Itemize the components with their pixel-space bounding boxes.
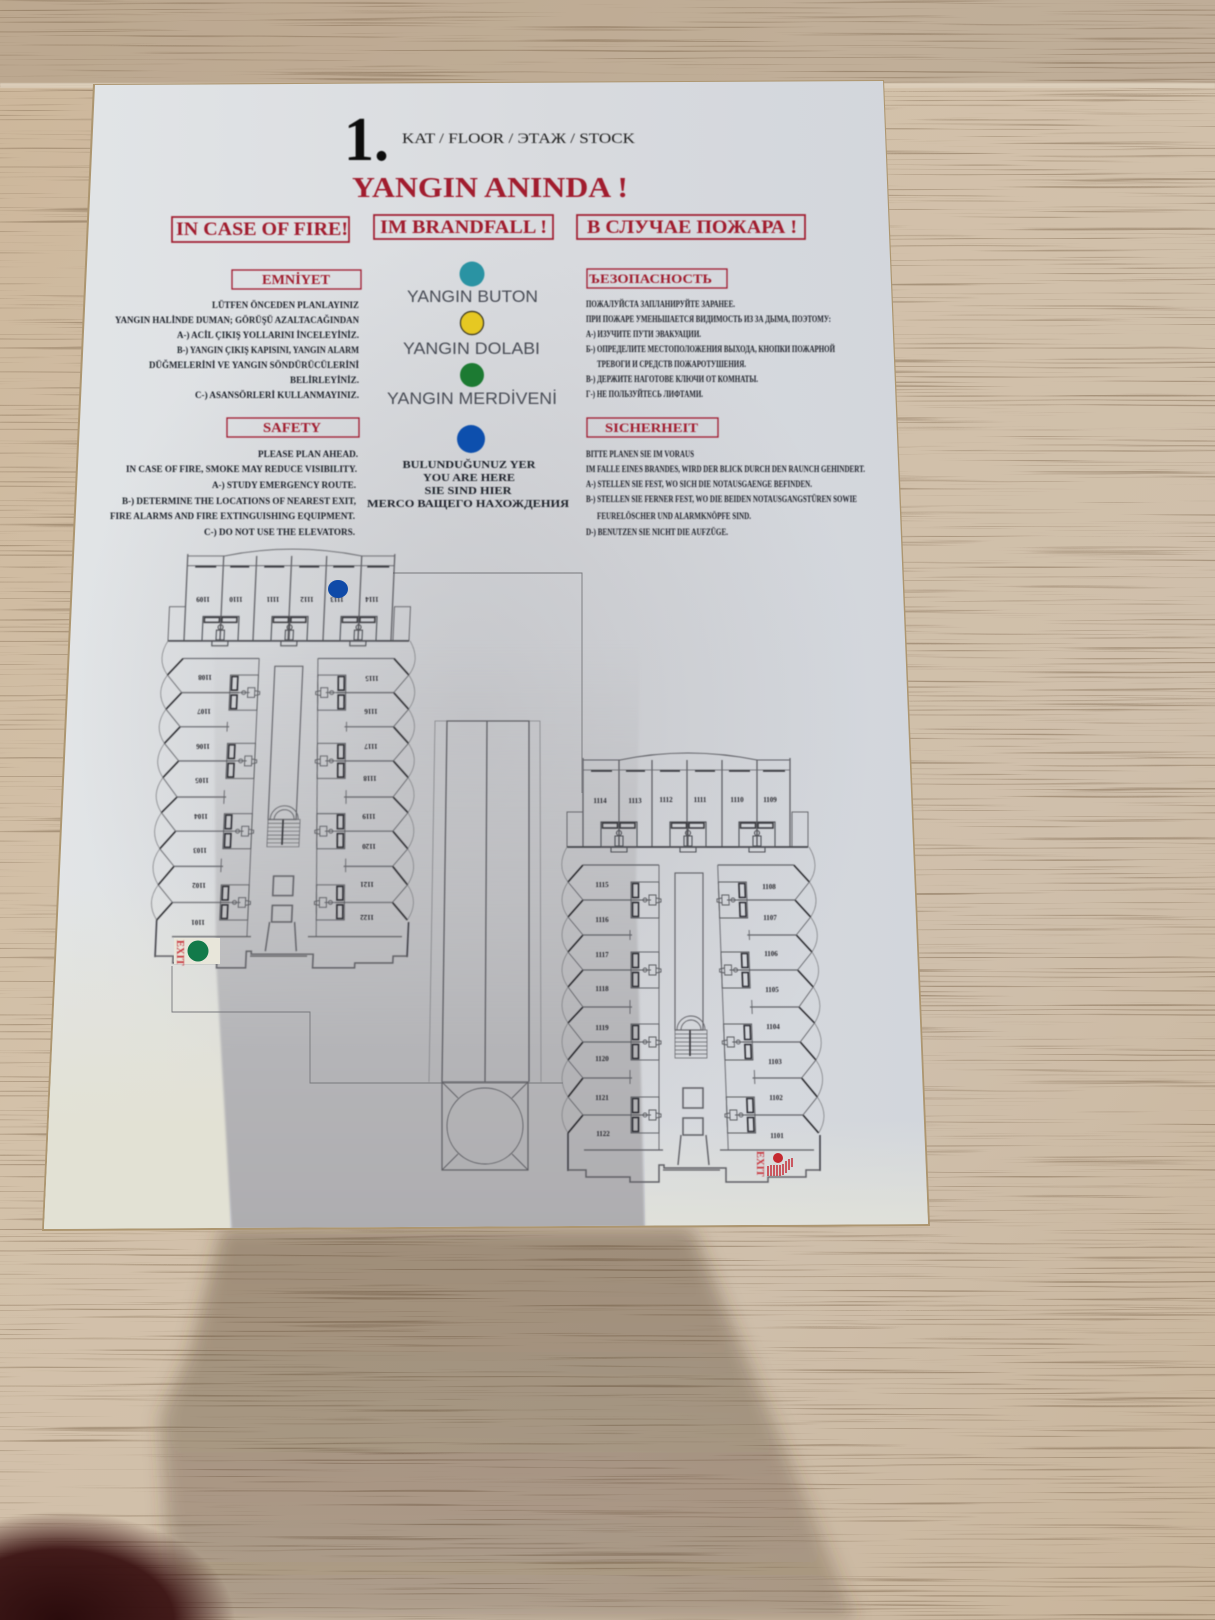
section: sicherheit: IM FALLE EINES BRANDES, WIRD DER BLICK DURCH DEN RAUNCH GEHINDERT. <box>586 465 865 475</box>
section: safety: C-) DO NOT USE THE ELEVATORS. <box>204 527 355 538</box>
room numbers: right wing: 1109 <box>763 796 777 804</box>
room numbers: right wing: 1103 <box>768 1058 782 1066</box>
section: emniyet: YANGIN HALİNDE DUMAN; GÖRÜŞÜ AZALTACAĞINDAN <box>115 313 359 326</box>
legend: you are here: SIE SIND HIER <box>424 485 513 497</box>
room numbers: right wing: 1121 <box>595 1094 609 1102</box>
section: safety: SAFETY <box>263 420 321 435</box>
exit marker: right wing <box>754 1151 792 1177</box>
room numbers: right wing: 1115 <box>595 881 609 889</box>
room numbers: right wing: 1122 <box>596 1130 610 1138</box>
room numbers: right wing: 1105 <box>765 986 779 994</box>
section: russian safety: ПОЖАЛУЙСТА ЗАПЛАНИРУЙТЕ ЗАРАНЕЕ. <box>586 298 735 310</box>
section: emniyet: LÜTFEN ÖNCEDEN PLANLAYINIZ <box>212 298 359 311</box>
dark blob at bottom-left corner <box>0 1500 240 1620</box>
section: sicherheit: B-) STELLEN SIE FERNER FEST, WO DIE BEIDEN NOTAUSGANGSTÜREN SOWIE <box>586 492 857 505</box>
room numbers: left wing: 1102 <box>192 881 206 889</box>
section: emniyet: EMNİYET <box>262 272 330 287</box>
room numbers: right wing: 1110 <box>730 796 744 804</box>
section: safety: A-) STUDY EMERGENCY ROUTE. <box>212 480 356 491</box>
legend: you are here <box>367 425 569 510</box>
room numbers: left wing: 1104 <box>194 812 208 820</box>
section: emniyet: DÜĞMELERİNİ VE YANGIN SÖNDÜRÜCÜLERİNİ <box>149 358 359 371</box>
room numbers: right wing: 1113 <box>628 797 642 805</box>
panel: fire plan board <box>30 60 950 1260</box>
section: emniyet: BELİRLEYİNİZ. <box>290 374 359 386</box>
legend: fire cabinet: YANGIN DOLABI <box>403 340 540 358</box>
exit marker: left wing <box>174 938 220 966</box>
room numbers: left wing: 1115 <box>365 674 379 682</box>
section: sicherheit: D-) BENUTZEN SIE NICHT DIE AUFZÜGE. <box>586 525 728 538</box>
room numbers: left wing: 1116 <box>364 707 378 715</box>
room numbers: right wing: 1114 <box>593 797 607 805</box>
room numbers: left wing: 1112 <box>300 595 314 603</box>
room numbers: right wing: 1108 <box>762 883 776 891</box>
marker: you are here dot on plan <box>328 580 348 598</box>
section: safety: FIRE ALARMS AND FIRE EXTINGUISHING EQUIPMENT. <box>110 512 355 522</box>
section: sicherheit: FEURELÖSCHER UND ALARMKNÖPFE SIND. <box>597 509 751 522</box>
room numbers: right wing: 1104 <box>766 1023 780 1031</box>
section: russian safety: В-) ДЕРЖИТЕ НАГОТОВЕ КЛЮЧИ ОТ КОМНАТЫ. <box>586 374 758 385</box>
legend: fire button: YANGIN BUTON <box>407 288 538 306</box>
room numbers: left wing: 1113 <box>330 595 344 603</box>
section: emniyet: C-) ASANSÖRLERİ KULLANMAYINIZ. <box>195 388 359 401</box>
heading box: im brandfall: IM BRANDFALL ! <box>380 217 547 238</box>
section: russian safety: ТРЕВОГИ И СРЕДСТВ ПОЖАРОТУШЕНИЯ. <box>597 360 746 370</box>
legend: you are here: YOU ARE HERE <box>423 472 515 484</box>
legend: fire stairs <box>387 363 557 408</box>
heading box: in case of fire: IN CASE OF FIRE! <box>176 219 348 240</box>
room numbers: left wing: 1103 <box>193 846 207 854</box>
section: safety: IN CASE OF FIRE, SMOKE MAY REDUCE VISIBILITY. <box>126 465 357 475</box>
floor number heading: 1. <box>344 106 389 174</box>
section: russian safety: ЪЕЗОПАСНОСТЬ <box>589 271 712 286</box>
room numbers: left wing: 1110 <box>229 595 243 603</box>
floor plan: left wing <box>148 549 431 968</box>
room numbers: left wing: 1101 <box>191 918 205 926</box>
room numbers: right wing: 1107 <box>763 914 777 922</box>
legend: fire button <box>407 262 538 306</box>
marker: fire stairs dot on plan <box>188 940 208 962</box>
room numbers: right wing: 1102 <box>769 1094 783 1102</box>
floor plan: right wing <box>562 753 826 1182</box>
section: safety: B-) DETERMINE THE LOCATIONS OF NEAREST EXIT, <box>122 496 357 507</box>
room numbers: left wing: 1119 <box>362 812 376 820</box>
room numbers: left wing: 1118 <box>363 774 377 782</box>
room numbers: left wing: 1111 <box>266 595 279 603</box>
legend: you are here: MERCO ВАЩЕГО НАХОЖДЕНИЯ <box>367 498 569 510</box>
room numbers: right wing: 1112 <box>659 796 673 804</box>
room numbers: left wing: 1108 <box>198 673 212 681</box>
section: russian safety: А-) ИЗУЧИТЕ ПУТИ ЭВАКУАЦИИ. <box>586 329 701 340</box>
title: YANGIN ANINDA ! <box>352 173 628 204</box>
legend: you are here: BULUNDUĞUNUZ YER <box>402 458 537 471</box>
section: russian safety: Б-) ОПРЕДЕЛИТЕ МЕСТОПОЛОЖЕНИЯ ВЫХОДА, КНОПКИ ПОЖАРНОЙ <box>586 343 835 355</box>
room numbers: left wing: 1114 <box>365 595 379 603</box>
room numbers: left wing: 1107 <box>197 707 211 715</box>
section: sicherheit: BITTE PLANEN SIE IM VORAUS <box>586 450 694 460</box>
section: emniyet: B-) YANGIN ÇIKIŞ KAPISINI, YANGIN ALARM <box>177 345 359 356</box>
room numbers: right wing: 1106 <box>764 950 778 958</box>
exit marker: right wing: EXIT <box>754 1151 765 1177</box>
floor number heading <box>344 106 635 174</box>
room numbers: left wing: 1117 <box>364 742 378 750</box>
room numbers: right wing: 1101 <box>770 1132 784 1140</box>
long courtyard plan <box>429 721 541 1170</box>
room numbers: right wing: 1119 <box>595 1024 609 1032</box>
section: sicherheit: SICHERHEIT <box>605 420 698 435</box>
room numbers: right wing <box>593 796 784 1140</box>
section: safety: PLEASE PLAN AHEAD. <box>258 450 358 460</box>
room numbers: right wing: 1118 <box>595 985 609 993</box>
room numbers: right wing: 1111 <box>694 796 707 804</box>
room numbers: left wing: 1122 <box>360 913 374 921</box>
shadow on floor <box>160 1228 856 1620</box>
section: safety <box>110 418 359 538</box>
room numbers: left wing <box>191 595 379 926</box>
room numbers: left wing: 1106 <box>196 742 210 750</box>
section: sicherheit: A-) STELLEN SIE FEST, WO SICH DIE NOTAUSGAENGE BEFINDEN. <box>586 479 812 490</box>
legend: fire stairs: YANGIN MERDİVENİ <box>387 389 557 408</box>
site outline <box>172 573 582 1083</box>
room numbers: right wing: 1116 <box>595 916 609 924</box>
room numbers: right wing: 1120 <box>595 1055 609 1063</box>
room numbers: right wing: 1117 <box>595 951 609 959</box>
heading box: russian: В СЛУЧАЕ ПОЖАРА ! <box>587 217 797 238</box>
room numbers: left wing: 1121 <box>360 880 374 888</box>
section: emniyet <box>115 270 361 401</box>
room numbers: left wing: 1120 <box>362 842 376 850</box>
section: russian safety: Г-) НЕ ПОЛЬЗУЙТЕСЬ ЛИФТАМИ. <box>586 388 703 400</box>
section: emniyet: A-) ACİL ÇIKIŞ YOLLARINI İNCELEYİNİZ. <box>177 329 359 341</box>
legend: fire cabinet <box>403 312 540 358</box>
section: russian safety: ПРИ ПОЖАРЕ УМЕНЬШАЕТСЯ ВИДИМОСТЬ ИЗ ЗА ДЫМА, ПОЭТОМУ: <box>586 315 831 325</box>
room numbers: left wing: 1109 <box>196 595 210 603</box>
room numbers: left wing: 1105 <box>195 776 209 784</box>
exit marker: left wing: EXIT <box>174 940 185 966</box>
section: sicherheit <box>586 418 865 538</box>
section: russian safety <box>586 269 835 400</box>
floor number heading: KAT / FLOOR / ЭТАЖ / STOCK <box>402 131 635 147</box>
